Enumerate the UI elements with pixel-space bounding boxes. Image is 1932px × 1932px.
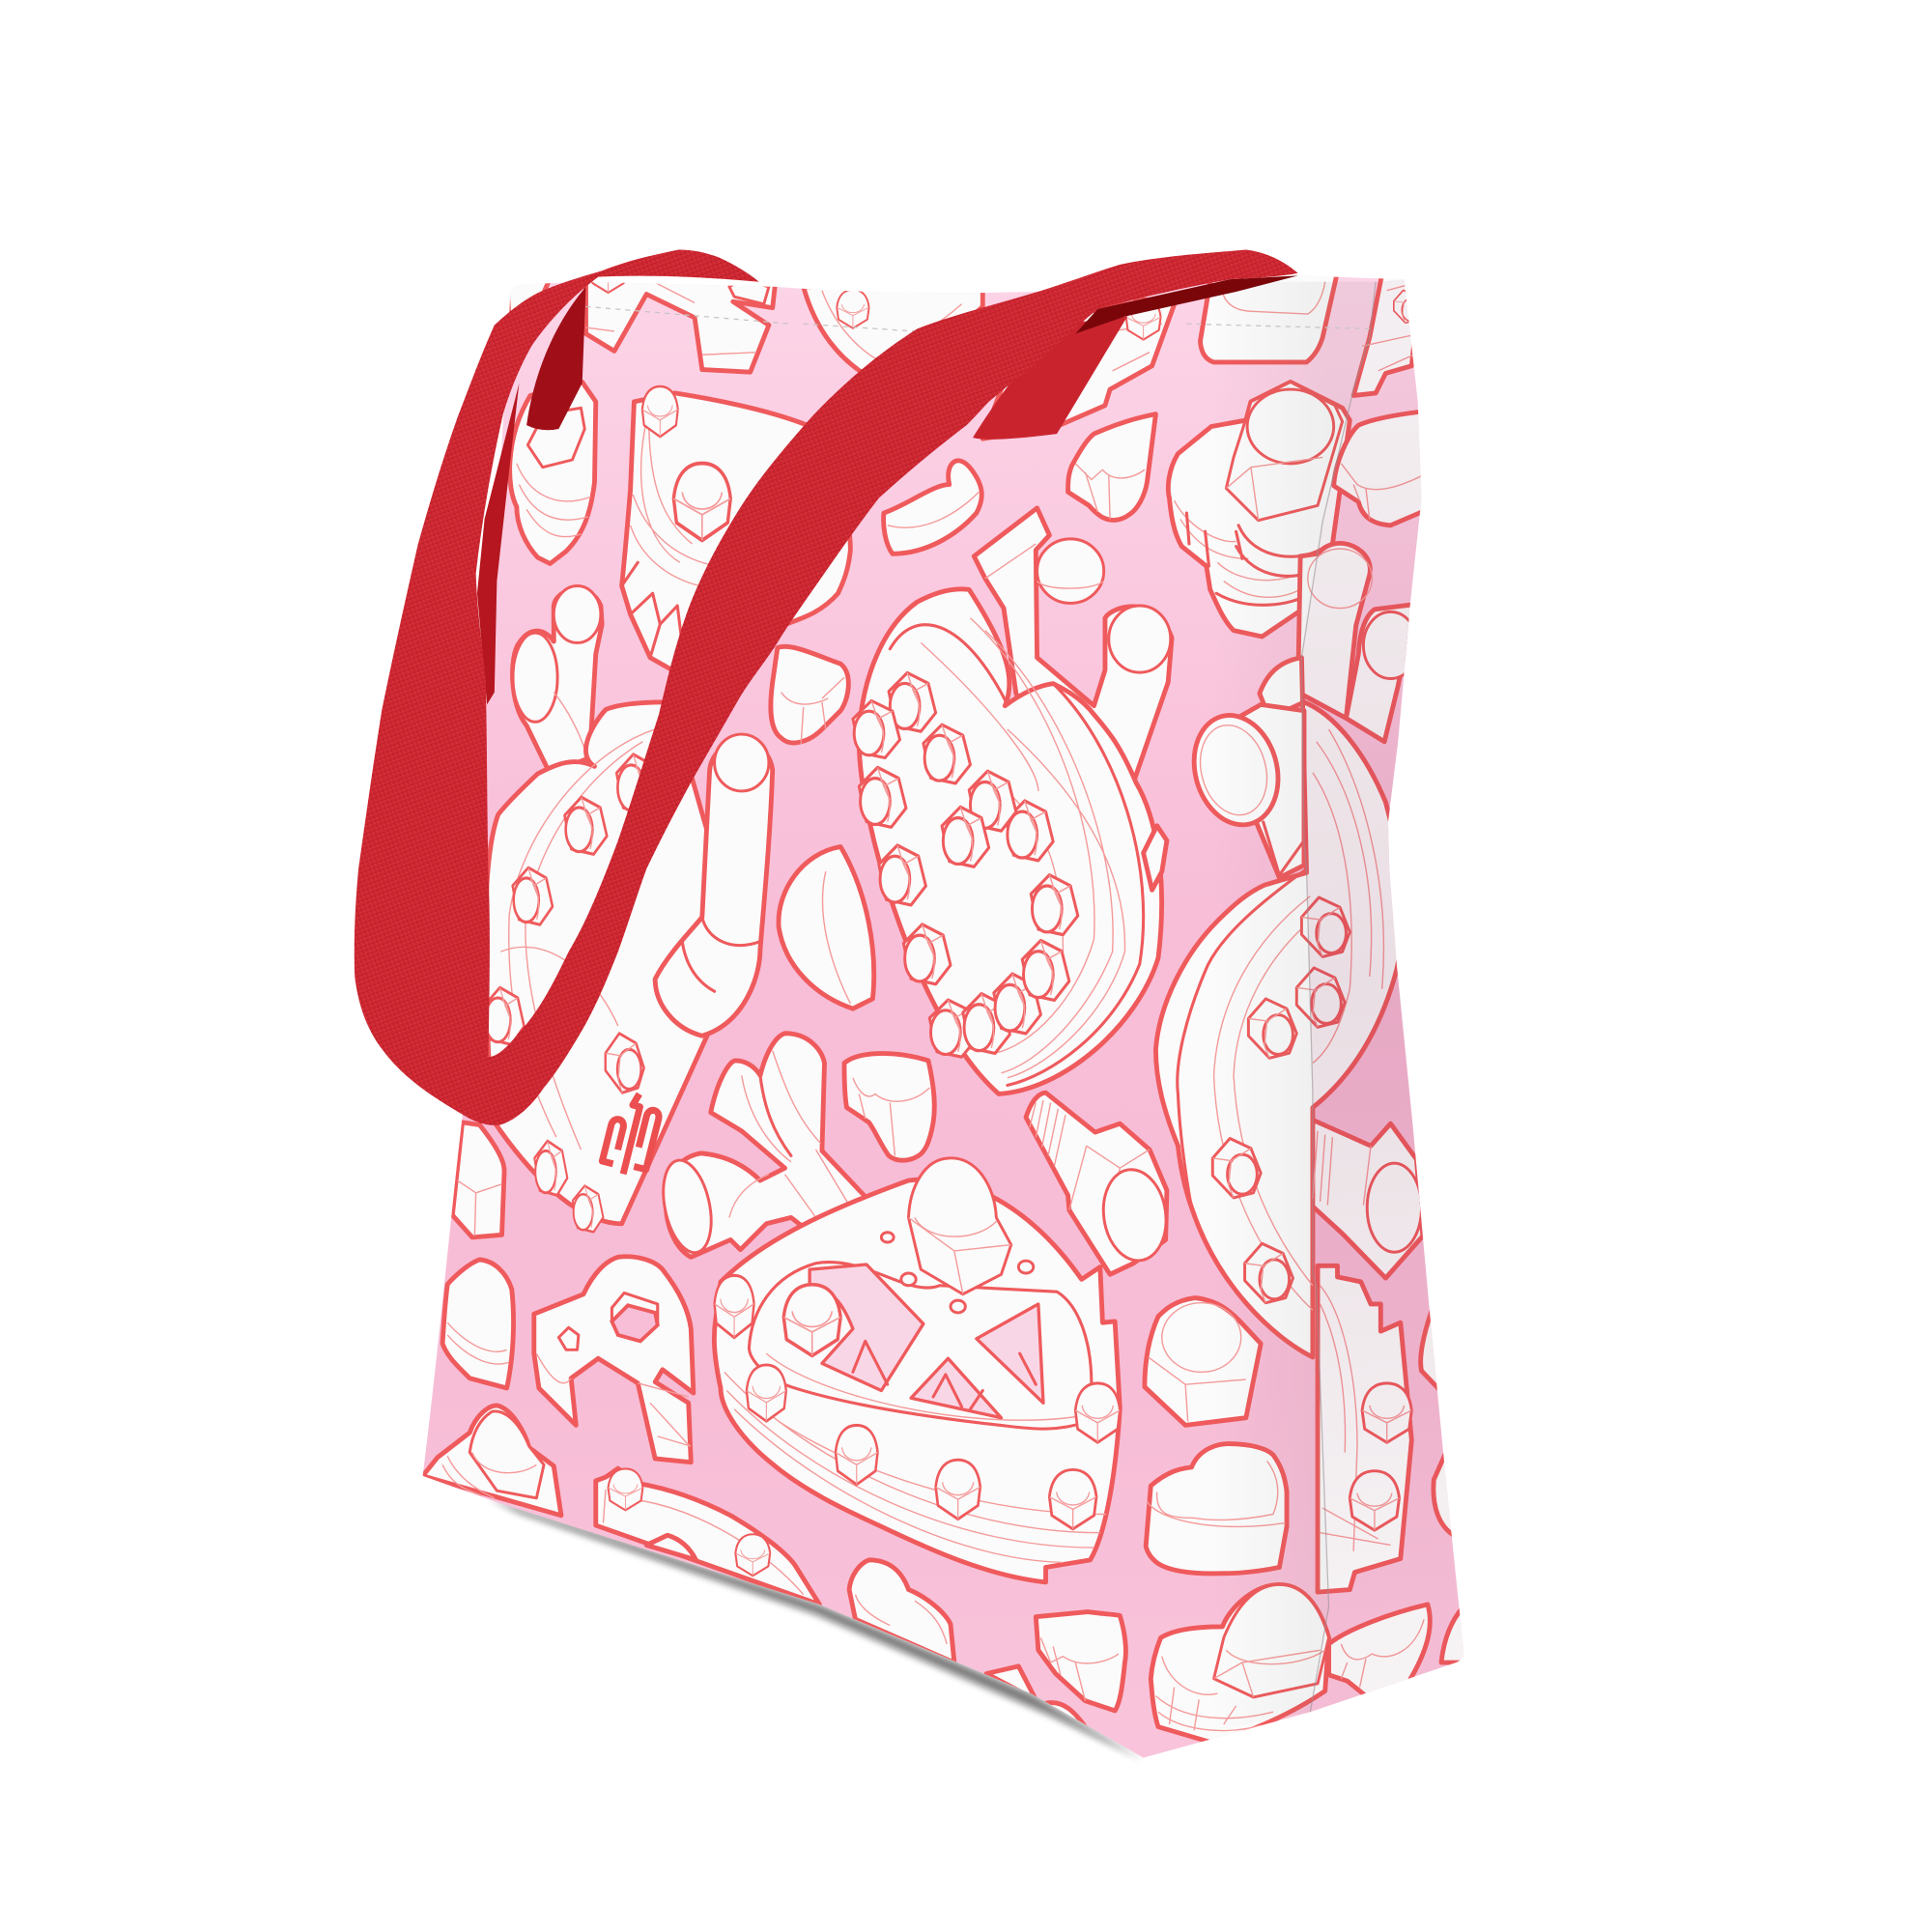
- bottom stacked bolt: [1151, 1584, 1329, 1743]
- heart and bolt pattern: [423, 251, 1471, 1743]
- top right heart: [1200, 272, 1338, 362]
- white heart centre: [779, 847, 874, 1009]
- fold shading: [1211, 282, 1376, 1730]
- gusset pipes: [1298, 543, 1418, 742]
- left pipes: [513, 586, 602, 774]
- partial heart near corner: [1046, 1703, 1100, 1743]
- top centre heart: [804, 287, 982, 379]
- left bolted heart: [484, 702, 717, 1232]
- corner piece at top left: [509, 283, 551, 312]
- stacked bolt bottom left: [423, 1406, 561, 1516]
- pipes above centre heart: [974, 508, 1172, 791]
- right gear heart: [1318, 1265, 1411, 1592]
- top left bracket shape: [583, 282, 778, 375]
- nut left edge: [452, 1122, 504, 1237]
- left stacked bolt: [510, 382, 596, 563]
- small triangle at bottom: [986, 1666, 1036, 1699]
- strap inner shadow: [1075, 275, 1298, 333]
- fold line: [1301, 282, 1376, 1712]
- drop heart: [1068, 414, 1155, 520]
- strap back end right: [973, 317, 1127, 440]
- heart at right edge: [1334, 412, 1434, 526]
- heart in gusset bottom: [1329, 1605, 1430, 1697]
- heart small upper: [771, 646, 848, 744]
- right stacked bolt: [1168, 382, 1350, 637]
- heart top centre: [884, 461, 981, 554]
- top piece behind strap: [982, 295, 1178, 439]
- bottom main heart: [714, 1158, 1120, 1582]
- gusset top piece: [1353, 274, 1422, 395]
- ring cylinder: [1182, 704, 1304, 878]
- elbow and twin pipes: [656, 1034, 864, 1257]
- pipe with elbow: [655, 734, 773, 1036]
- red strap: [355, 249, 1298, 1125]
- right ring heart: [1155, 658, 1403, 1357]
- small heart lower: [844, 1054, 934, 1160]
- icon: logo mark: [601, 1089, 664, 1179]
- strap back end left: [526, 287, 586, 430]
- heart left lower: [442, 1260, 514, 1388]
- nut: [1145, 1298, 1261, 1425]
- tote bag body: [423, 251, 1471, 1758]
- bottom partial heart: [596, 1468, 819, 1605]
- edge hearts: [1418, 1310, 1463, 1665]
- ground shadow: [488, 1498, 1144, 1760]
- strap inner layer: [477, 384, 519, 704]
- stitching: [586, 306, 1372, 336]
- bolt in gusset: [1313, 1120, 1423, 1278]
- bottom heart right: [1036, 1612, 1125, 1711]
- big gear heart: [622, 386, 850, 673]
- gusset shading: [1301, 278, 1471, 1712]
- centre bolted heart: [853, 589, 1167, 1094]
- threaded bolt: [1026, 1093, 1172, 1274]
- heart bottom right: [1146, 1444, 1287, 1574]
- ribbon hex plate: [534, 1257, 694, 1463]
- bottom heart centre: [849, 1560, 954, 1662]
